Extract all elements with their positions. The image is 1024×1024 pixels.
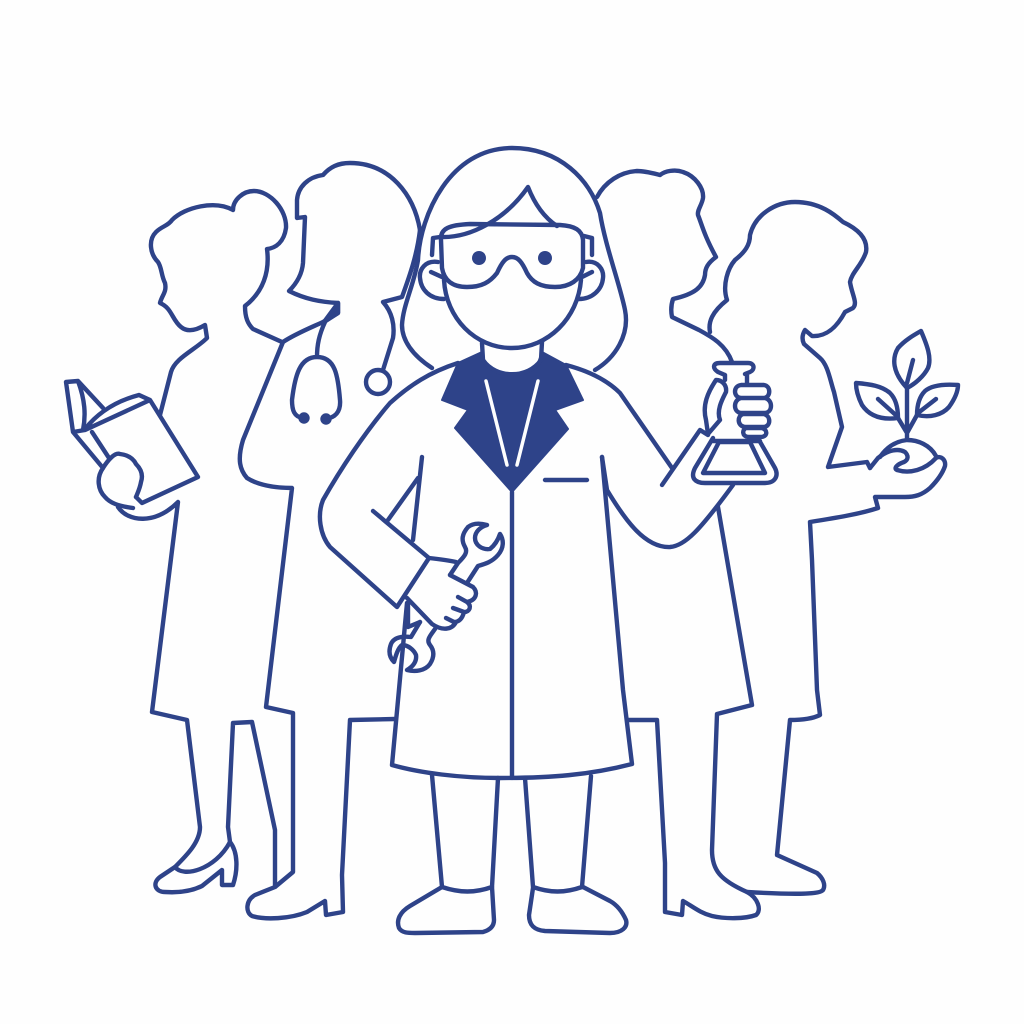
figure: central scientist in lab coat (320, 148, 777, 933)
long hair (402, 148, 626, 370)
goggle straps (432, 236, 592, 255)
coat right arm (566, 365, 733, 547)
hair right edge (383, 230, 420, 370)
skirt, leg and boot (628, 507, 759, 918)
open hand holding soil (747, 450, 945, 894)
flask (693, 363, 777, 483)
legs (432, 775, 591, 892)
figure: doctor with stethoscope (240, 163, 420, 918)
lanyard (486, 381, 538, 465)
coat body (392, 457, 632, 778)
wrench (390, 524, 503, 671)
hand gripping wrench (407, 558, 476, 629)
sleeve and dress (118, 502, 275, 892)
head, hair and torso (240, 163, 420, 918)
right shoe (529, 887, 626, 933)
figure: woman with bun holding a book (66, 191, 286, 892)
blue lapels (442, 352, 583, 492)
ears (420, 262, 603, 299)
heel shoe line (175, 842, 230, 872)
thumb (705, 380, 726, 434)
fringe (441, 187, 557, 237)
eyes (472, 251, 552, 265)
head and torso (597, 171, 732, 362)
head and torso (710, 202, 870, 468)
head and bun silhouette (151, 191, 286, 415)
stethoscope earpieces and chest piece (300, 303, 390, 422)
coat left arm (320, 363, 458, 607)
safety goggles (441, 224, 583, 287)
figure: woman at back right (597, 171, 759, 918)
inner sleeve fold (388, 457, 422, 540)
plant stem and leaves (856, 331, 958, 438)
left shoe (398, 887, 494, 933)
figure: woman holding a plant (710, 202, 958, 894)
hand on book (99, 454, 142, 508)
breast pocket (545, 478, 587, 482)
soil mound (880, 440, 936, 457)
neck (482, 342, 542, 374)
face (444, 280, 581, 348)
hand fingers on flask (735, 385, 771, 437)
book (66, 381, 198, 503)
stethoscope (292, 322, 340, 419)
